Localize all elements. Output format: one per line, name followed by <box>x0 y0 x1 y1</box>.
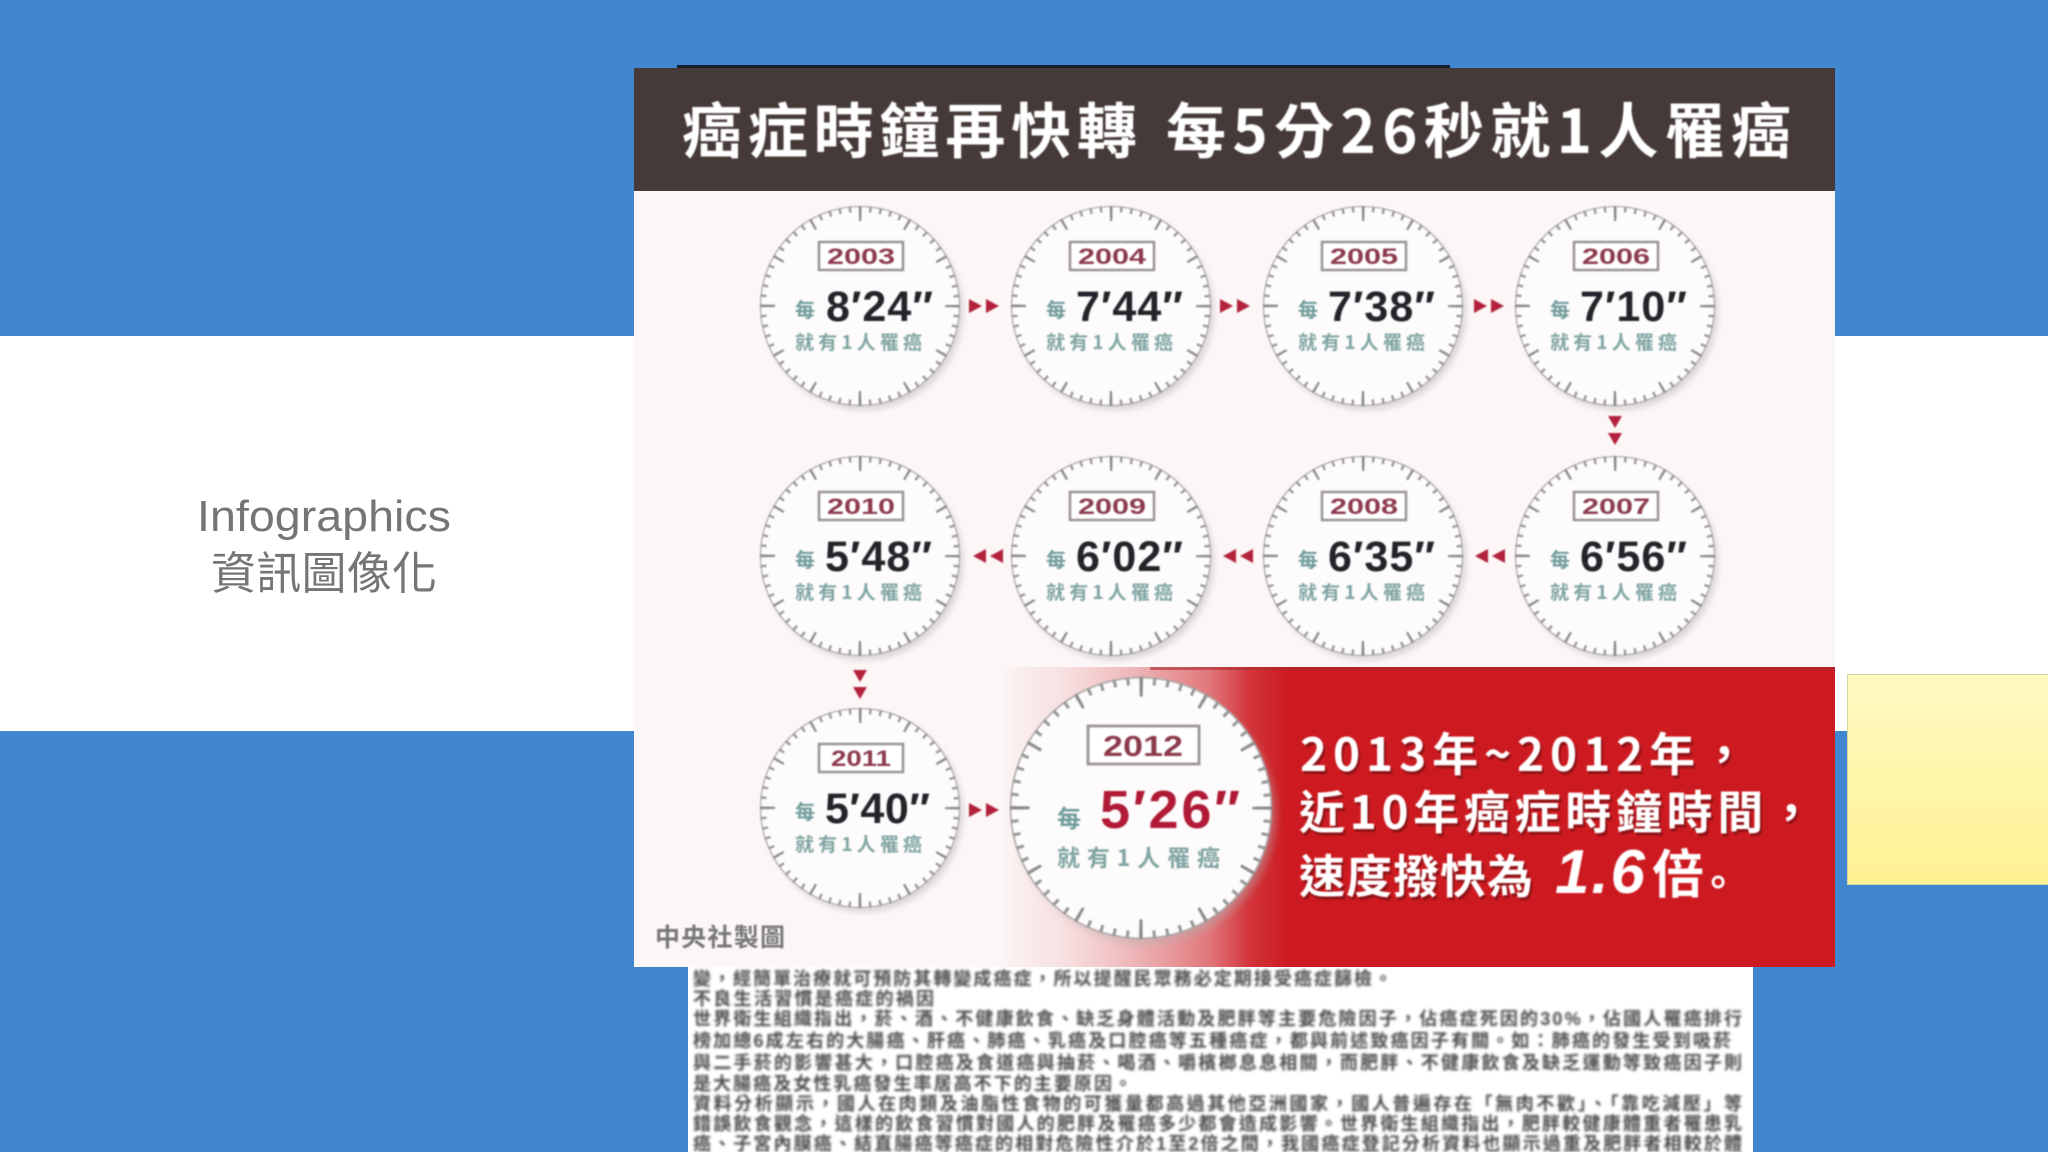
red callout text <box>1299 719 1816 910</box>
clock 2009: 每 <box>1046 544 1066 573</box>
white band <box>0 336 2048 731</box>
clock 2007: 6′56″ <box>1580 533 1687 581</box>
article text lines: 是大腸癌及女性乳癌發生率居高不下的主要原因。 <box>693 1073 1132 1094</box>
clock 2004: 2004 <box>1078 244 1147 269</box>
clock 2004 <box>1011 206 1214 410</box>
article text lines: 榜加總6成左右的大腸癌、肝癌、肺癌、乳癌及口腔癌等五種癌症，都與前述致癌因子有關。如：肺癌的發生受到吸菸 <box>693 1030 1731 1051</box>
clock 2005 <box>1263 206 1466 410</box>
clock 2012 highlighted: 就有1人罹癌 <box>1057 839 1220 873</box>
red callout text: 速度撥快為 <box>1299 841 1533 907</box>
arrows between clocks <box>853 299 1622 817</box>
article text lines: 與二手菸的影響甚大，口腔癌及食道癌與抽菸、喝酒、嚼檳榔息息相關，而肥胖、不健康飲食及缺乏運動等致癌因子則 <box>693 1052 1742 1073</box>
dark line behind panel <box>677 65 1450 69</box>
clock 2005: 2005 <box>1330 244 1398 269</box>
yellow note <box>1848 674 2048 884</box>
clock 2010: 就有1人罹癌 <box>795 578 922 605</box>
title bar <box>634 68 1835 191</box>
infographic panel <box>634 68 1835 967</box>
article text lines: 資料分析顯示，國人在肉類及油脂性食物的可獲量都高過其他亞洲國家，國人普遍存在「無肉不歡」、「靠吃減壓」等 <box>693 1093 1742 1114</box>
clock 2003: 就有1人罹癌 <box>795 328 922 355</box>
clock 2003 <box>760 206 963 410</box>
slide label: Infographics: 資訊圖像化 <box>211 537 437 602</box>
title: 癌症時鐘再快轉 <box>682 84 1137 171</box>
clock 2011: 每 <box>795 796 815 825</box>
source credit: 中央社製圖 <box>655 918 785 954</box>
clock 2008: 每 <box>1298 544 1318 573</box>
clock 2012 highlighted: 每 <box>1057 799 1081 834</box>
red callout text: 。 <box>1698 851 1738 909</box>
clock 2011: 2011 <box>831 746 891 771</box>
clock 2010: 每 <box>795 544 815 573</box>
slide label: Infographics: Infographics <box>197 492 451 541</box>
article text lines: 世界衛生組織指出，菸、酒、不健康飲食、缺乏身體活動及肥胖等主要危險因子，佔癌症死因的30%，佔國人罹癌排行 <box>693 1008 1742 1029</box>
clock 2006: 就有1人罹癌 <box>1550 328 1677 355</box>
clock 2009: 2009 <box>1078 494 1146 519</box>
red callout text: 近10年癌症時鐘時間， <box>1301 780 1816 846</box>
clock 2011: 5′40″ <box>825 785 930 833</box>
article text image <box>688 967 1753 1152</box>
clock 2012 highlighted: 5′26″ <box>1100 780 1240 840</box>
title: 每5分26秒就1人罹癌 <box>1166 84 1791 171</box>
clock 2008 <box>1263 456 1466 660</box>
clock 2004: 7′44″ <box>1076 283 1183 331</box>
clock 2003: 每 <box>795 294 815 323</box>
red callout text: 2013年~2012年， <box>1300 719 1747 785</box>
clock 2004: 就有1人罹癌 <box>1046 328 1173 355</box>
clock 2007: 就有1人罹癌 <box>1550 578 1677 605</box>
clock 2007 <box>1515 456 1718 660</box>
clock 2006: 7′10″ <box>1580 283 1687 331</box>
clock 2009 <box>1011 456 1214 660</box>
clock 2010 <box>760 456 963 660</box>
article text lines <box>693 968 1742 1152</box>
clock 2005: 就有1人罹癌 <box>1298 328 1425 355</box>
clock 2009: 就有1人罹癌 <box>1046 578 1173 605</box>
clock 2003: 8′24″ <box>826 283 933 331</box>
clock 2003: 2003 <box>827 244 895 269</box>
clock 2008: 就有1人罹癌 <box>1298 578 1425 605</box>
clock 2010: 2010 <box>827 494 895 519</box>
article text lines: 錯誤飲食觀念，這樣的飲食習慣對國人的肥胖及罹癌多少都會造成影響。世界衛生組織指出，肥胖較健康體重者罹患乳 <box>693 1113 1742 1134</box>
clock 2007: 2007 <box>1582 494 1650 519</box>
clock 2010: 5′48″ <box>825 533 932 581</box>
title <box>682 84 1791 171</box>
clock 2009: 6′02″ <box>1076 533 1183 581</box>
red callout text: 速度撥快為 <box>1301 844 1535 910</box>
clock 2006: 2006 <box>1582 244 1650 269</box>
clock 2008: 6′35″ <box>1328 533 1435 581</box>
clock 2005: 每 <box>1298 294 1318 323</box>
article text lines: 不良生活習慣是癌症的禍因 <box>693 988 934 1009</box>
red callout text: 1.6 <box>1555 838 1646 907</box>
clock 2011: 就有1人罹癌 <box>795 830 922 857</box>
clock 2005: 7′38″ <box>1328 283 1435 331</box>
red callout text: 倍 <box>1652 833 1704 908</box>
clock 2004: 每 <box>1046 294 1066 323</box>
slide label: Infographics <box>197 492 451 602</box>
red highlight band <box>1000 667 1835 967</box>
red callout text: 2013年~2012年， <box>1302 722 1749 788</box>
clock 2008: 2008 <box>1330 494 1398 519</box>
clock 2012 highlighted: 2012 <box>1103 731 1183 763</box>
clock 2007: 每 <box>1550 544 1570 573</box>
clock 2011 <box>760 708 963 912</box>
clock 2006: 每 <box>1550 294 1570 323</box>
clock 2006 <box>1515 206 1718 410</box>
red callout text: 近10年癌症時鐘時間， <box>1299 777 1814 843</box>
article text lines: 變，經簡單治療就可預防其轉變成癌症，所以提醒民眾務必定期接受癌症篩檢。 <box>693 968 1392 989</box>
clock 2012 highlighted <box>1010 677 1276 944</box>
